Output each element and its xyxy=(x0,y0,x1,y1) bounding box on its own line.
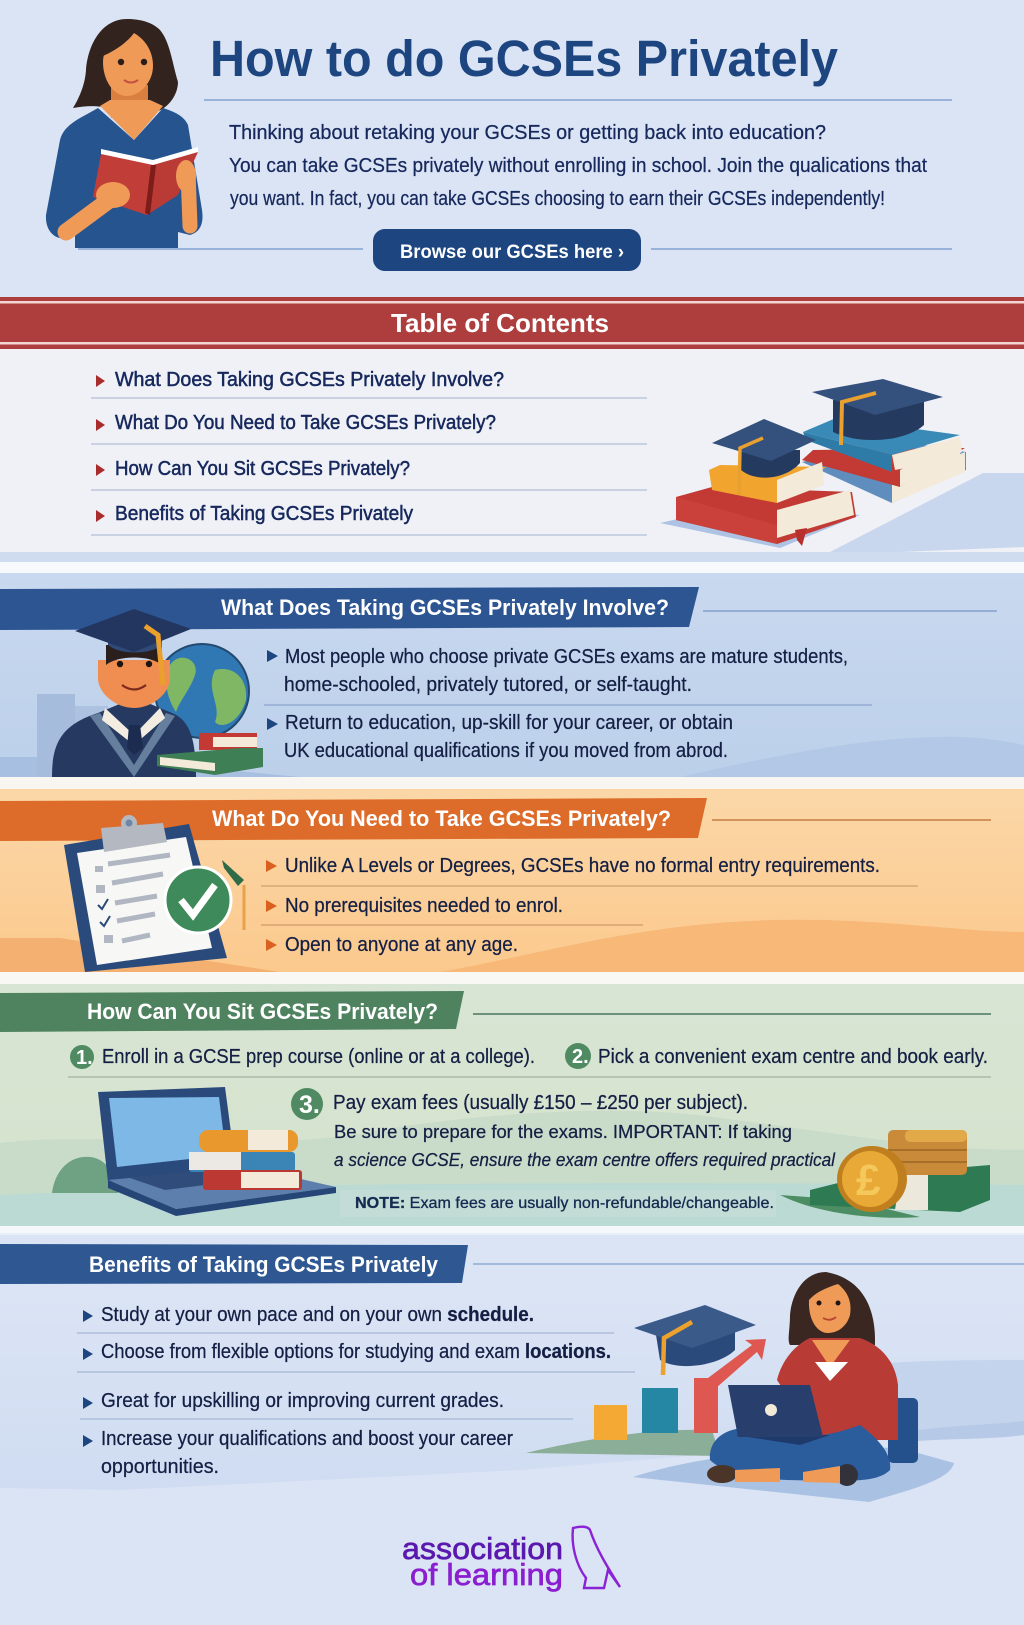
banner: heading: What Do You Need to Take GCSEs Privately? xyxy=(212,806,671,831)
note xyxy=(340,1190,776,1217)
step 3: a science GCSE, ensure the exam centre offers required practical xyxy=(334,1149,836,1170)
bullet list xyxy=(77,1304,635,1478)
banner: heading xyxy=(0,1244,468,1284)
bullet list: UK educational qualifications if you moved from abrod. xyxy=(284,740,728,762)
step 3: Be sure to prepare for the exams. IMPORTANT: If taking xyxy=(334,1121,792,1142)
contents list: Benefits of Taking GCSEs Privately xyxy=(115,503,413,525)
intro text: Thinking about retaking your GCSEs or getting back into education? xyxy=(229,122,826,144)
banner: heading: How Can You Sit GCSEs Privately? xyxy=(87,999,438,1024)
banner: heading: Benefits of Taking GCSEs Privately xyxy=(89,1252,438,1277)
bullet list: opportunities. xyxy=(101,1456,219,1478)
step 2: Pick a convenient exam centre and book early. xyxy=(598,1046,988,1068)
button: browse GCSEs: Browse our GCSEs here › xyxy=(400,242,624,263)
panel: table of contents xyxy=(0,297,1024,573)
intro text: You can take GCSEs privately without enrolling in school. Join the qualications that xyxy=(229,155,927,177)
step 2: 2. xyxy=(572,1046,589,1068)
bullet list: Increase your qualifications and boost your career xyxy=(101,1428,513,1450)
contents list: What Does Taking GCSEs Privately Involve? xyxy=(115,369,504,391)
header panel xyxy=(46,19,952,271)
step 1: 1. xyxy=(76,1047,93,1069)
bullet list xyxy=(261,855,918,956)
banner: table of contents: Table of Contents xyxy=(391,308,609,338)
bullet list: No prerequisites needed to enrol. xyxy=(285,895,563,917)
banner: heading xyxy=(0,587,699,630)
contents list: How Can You Sit GCSEs Privately? xyxy=(115,458,410,480)
icon: clipboard with green check xyxy=(64,815,244,972)
logo: association of learning xyxy=(402,1527,620,1592)
note: NOTE: Exam fees are usually non-refundable/changeable. xyxy=(355,1195,774,1212)
icon: stacked books and graduation caps xyxy=(660,379,966,548)
banner: table of contents xyxy=(0,297,1024,349)
contents list xyxy=(91,369,647,535)
logo: association of learning: of learning xyxy=(410,1557,563,1592)
icon: laptop with books xyxy=(98,1087,336,1216)
bullet list: Unlike A Levels or Degrees, GCSEs have no formal entry requirements. xyxy=(285,855,880,877)
step 1: Enroll in a GCSE prep course (online or at a college). xyxy=(102,1046,535,1068)
bullet list: Return to education, up-skill for your career, or obtain xyxy=(285,712,733,734)
intro text xyxy=(229,122,927,210)
bullet list: Great for upskilling or improving current grades. xyxy=(101,1390,504,1412)
banner: heading xyxy=(0,798,707,841)
banner: heading xyxy=(0,991,464,1032)
icon: graduate with globe and books xyxy=(37,609,263,777)
step 3: Pay exam fees (usually £150 – £250 per subject). xyxy=(333,1092,748,1114)
bullet list: Open to anyone at any age. xyxy=(285,934,518,956)
step 3 xyxy=(291,1088,836,1170)
button: browse GCSEs xyxy=(373,229,641,271)
panel: benefits of taking GCSEs privately xyxy=(0,1233,1024,1502)
bullet list: Most people who choose private GCSEs exams are mature students, xyxy=(285,646,848,668)
title: How to do GCSEs Privately xyxy=(210,30,839,87)
panel: what do you need to take GCSEs privately xyxy=(0,789,1024,984)
bullet list: Choose from flexible options for studying and exam locations. xyxy=(101,1341,611,1363)
icon: woman reading a book xyxy=(46,19,203,248)
icon: pound coin and money xyxy=(780,1130,990,1218)
icon: student with laptop, growth chart and cap xyxy=(526,1272,954,1502)
bullet list: Study at your own pace and on your own schedule. xyxy=(101,1304,534,1326)
logo: association of learning: association xyxy=(402,1531,563,1566)
panel: what does taking GCSEs privately involve xyxy=(0,573,1024,789)
banner: heading: What Does Taking GCSEs Privately Involve? xyxy=(221,595,669,620)
panel: how can you sit GCSEs privately xyxy=(0,984,1024,1233)
contents list: What Do You Need to Take GCSEs Privately? xyxy=(115,412,496,434)
intro text: you want. In fact, you can take GCSEs choosing to earn their GCSEs independently! xyxy=(230,188,885,210)
step 3: 3. xyxy=(299,1091,320,1119)
bullet list: home-schooled, privately tutored, or self-taught. xyxy=(284,674,692,696)
bullet list xyxy=(264,646,872,762)
icon: pound coin and money: £ xyxy=(856,1156,881,1205)
